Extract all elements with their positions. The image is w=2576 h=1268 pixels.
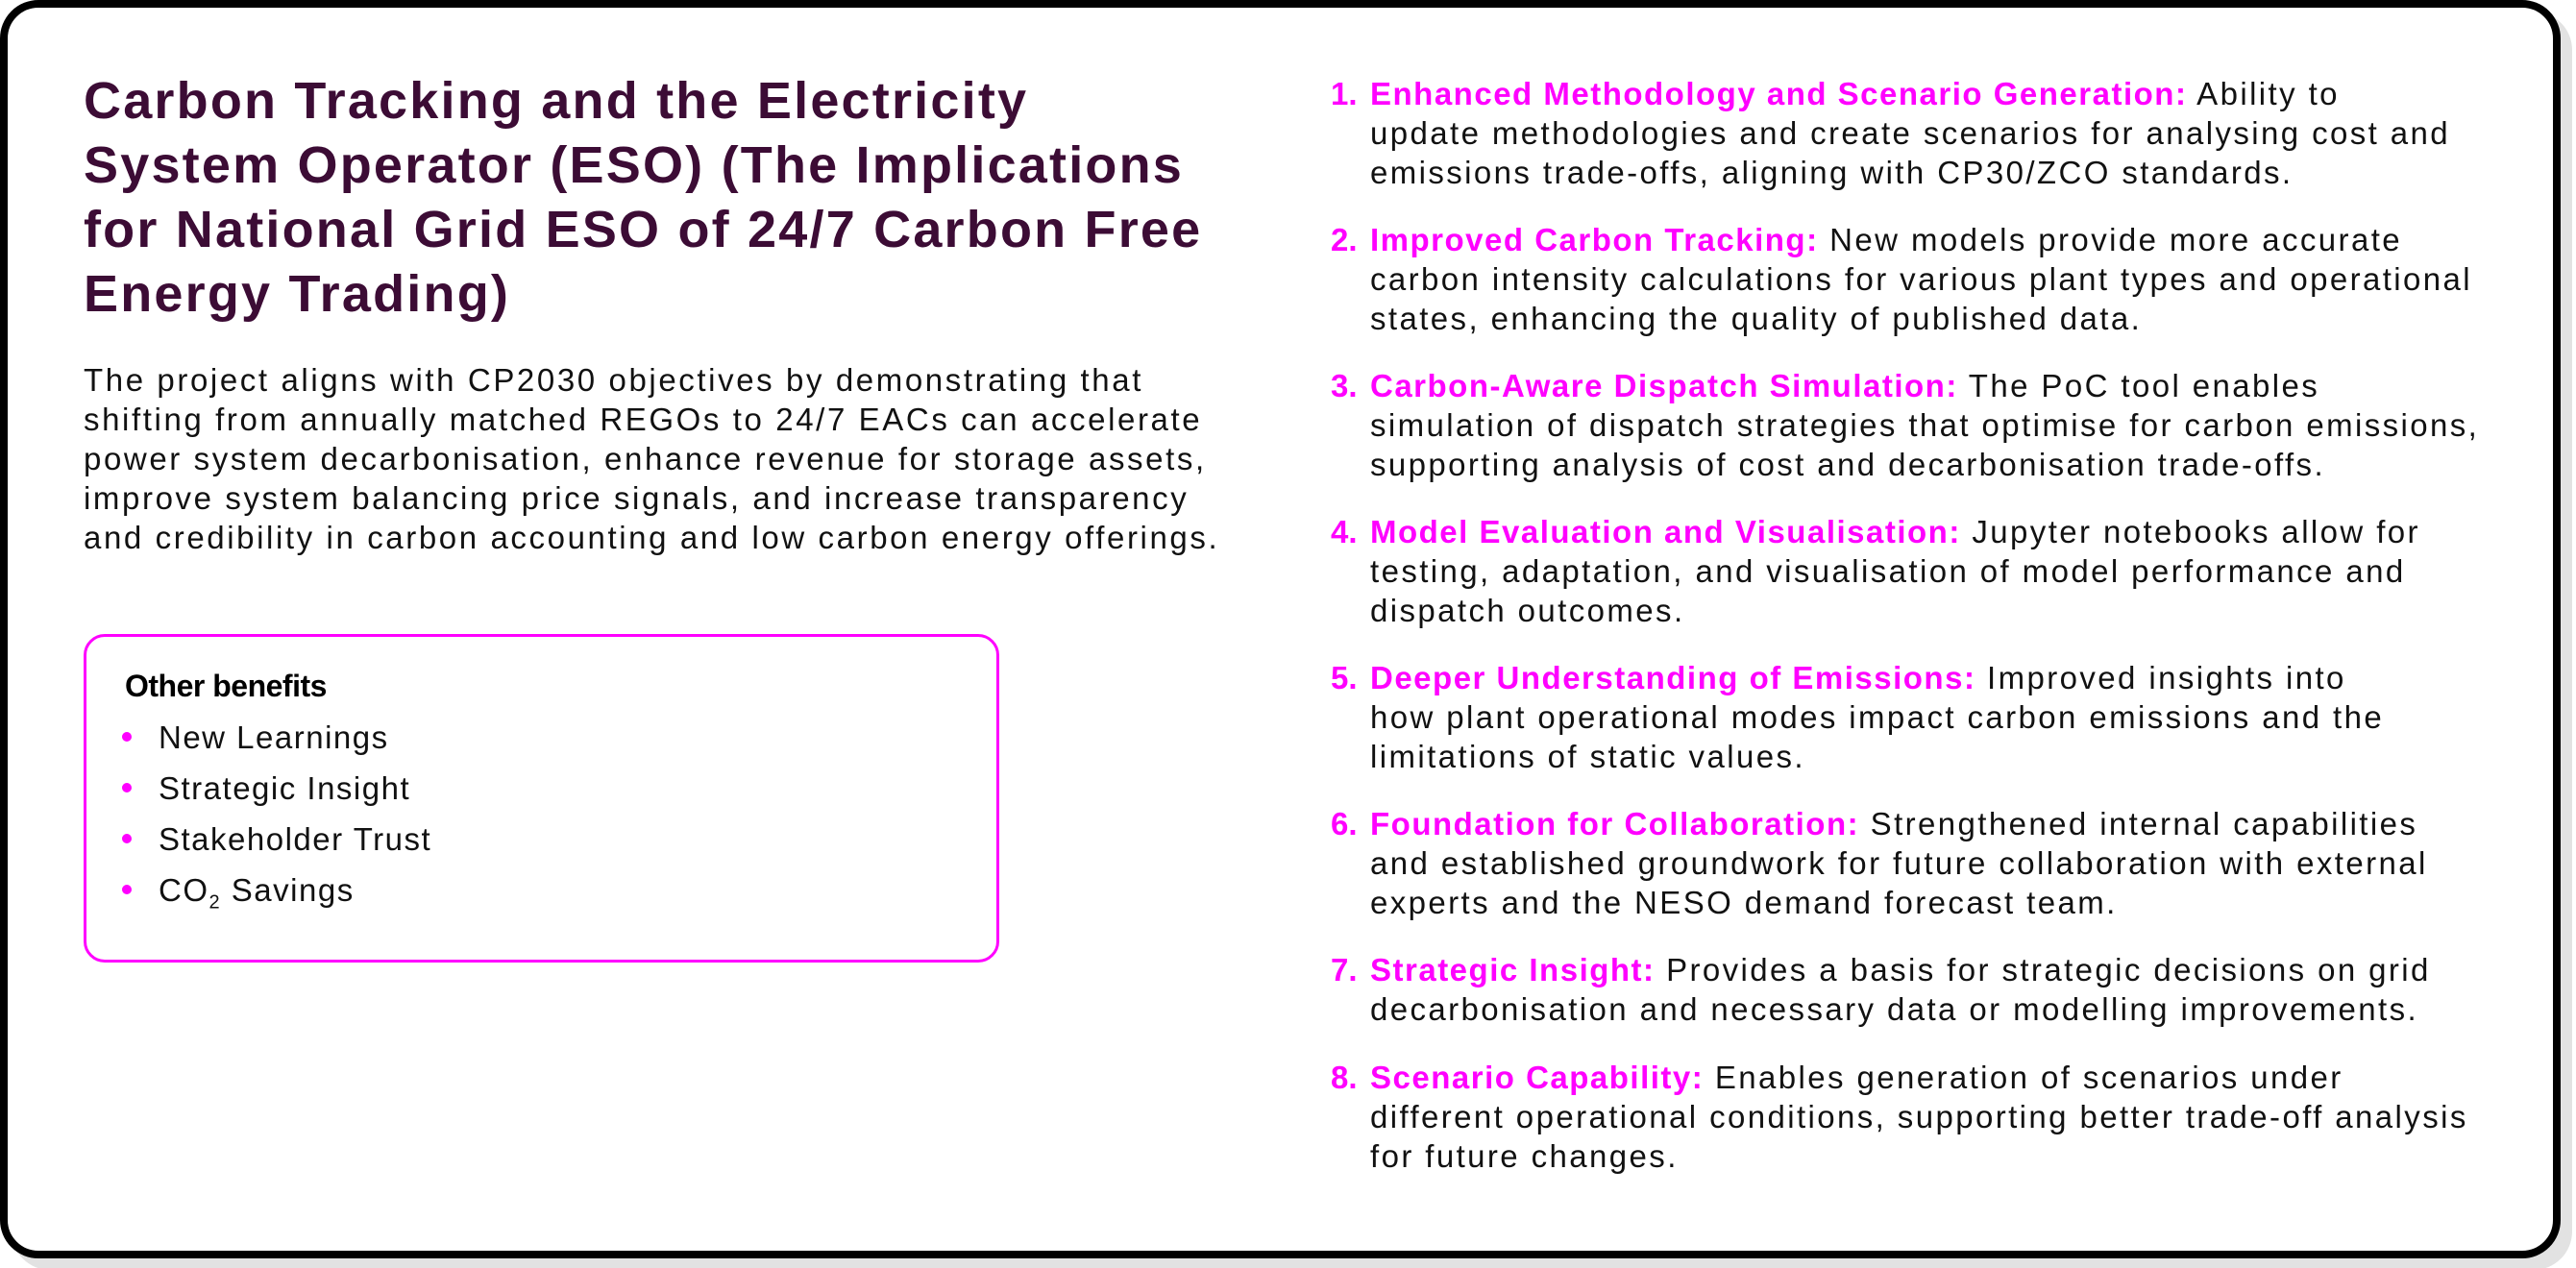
intro paragraph: and credibility in carbon accounting and low carbon energy offerings. (84, 520, 1219, 555)
item 8: different operational conditions, supporting better trade-off analysis (1370, 1099, 2468, 1134)
intro paragraph: power system decarbonisation, enhance revenue for storage assets, (84, 441, 1207, 476)
item 2: states, enhancing the quality of published data. (1370, 301, 2142, 336)
item 7: Strategic Insight: Provides a basis for strategic decisions on grid (1370, 952, 2431, 988)
title (84, 72, 1202, 323)
title: Energy Trading) (84, 265, 510, 323)
intro paragraph: The project aligns with CP2030 objectives by demonstrating that (84, 362, 1143, 398)
item 6: experts and the NESO demand forecast team. (1370, 885, 2118, 920)
item 5: 5. (1331, 660, 1358, 695)
item 5: Deeper Understanding of Emissions: Improved insights into (1370, 660, 2346, 695)
item 5 (1331, 660, 2384, 774)
panel: other benefits (84, 634, 999, 963)
item 4 (1331, 514, 2420, 628)
item 2 (1331, 222, 2472, 336)
item 3: Carbon-Aware Dispatch Simulation: The PoC tool enables (1370, 368, 2319, 403)
item 3: 3. (1331, 368, 1358, 403)
item 6: 6. (1331, 806, 1358, 841)
item 1 (1331, 76, 2450, 190)
item 2: Improved Carbon Tracking: New models provide more accurate (1370, 222, 2402, 257)
item 8 (1331, 1060, 2468, 1174)
bullet: new learnings: New Learnings (159, 719, 389, 755)
item 2: carbon intensity calculations for various plant types and operational (1370, 261, 2472, 297)
item 3 (1331, 368, 2479, 482)
item 4: testing, adaptation, and visualisation of model performance and (1370, 553, 2406, 589)
benefits heading: Other benefits (125, 669, 327, 703)
intro paragraph: improve system balancing price signals, and increase transparency (84, 480, 1189, 516)
item 4: dispatch outcomes. (1370, 593, 1685, 628)
intro paragraph: shifting from annually matched REGOs to 24/7 EACs can accelerate (84, 402, 1202, 437)
title: System Operator (ESO) (The Implications (84, 136, 1184, 194)
item 3: supporting analysis of cost and decarbonisation trade-offs. (1370, 447, 2325, 482)
item 1: update methodologies and create scenarios for analysing cost and (1370, 115, 2450, 151)
intro paragraph (84, 362, 1219, 555)
item 8: Scenario Capability: Enables generation of scenarios under (1370, 1060, 2343, 1095)
item 4: Model Evaluation and Visualisation: Jupyter notebooks allow for (1370, 514, 2420, 549)
item 4: 4. (1331, 514, 1358, 549)
item 2: 2. (1331, 222, 1358, 257)
item 5: how plant operational modes impact carbon emissions and the (1370, 699, 2384, 735)
item 1: 1. (1331, 76, 1358, 111)
item 6: and established groundwork for future collaboration with external (1370, 845, 2428, 881)
item 6: Foundation for Collaboration: Strengthened internal capabilities (1370, 806, 2417, 841)
item 8: for future changes. (1370, 1138, 1679, 1174)
bullet: strategic insight: Strategic Insight (159, 770, 410, 806)
item 3: simulation of dispatch strategies that optimise for carbon emissions, (1370, 407, 2479, 443)
item 6 (1331, 806, 2428, 920)
item 1: Enhanced Methodology and Scenario Generation: Ability to (1370, 76, 2340, 111)
title: Carbon Tracking and the Electricity (84, 72, 1028, 130)
item 7 (1331, 952, 2431, 1027)
item 5: limitations of static values. (1370, 739, 1805, 774)
bullet: co2 savings: CO2 Savings (159, 872, 355, 914)
item 1: emissions trade-offs, aligning with CP30/ZCO standards. (1370, 155, 2293, 190)
item 7: decarbonisation and necessary data or modelling improvements. (1370, 991, 2418, 1027)
item 8: 8. (1331, 1060, 1358, 1095)
item 7: 7. (1331, 952, 1358, 988)
title: for National Grid ESO of 24/7 Carbon Free (84, 201, 1202, 258)
bullet: stakeholder trust: Stakeholder Trust (159, 821, 431, 857)
